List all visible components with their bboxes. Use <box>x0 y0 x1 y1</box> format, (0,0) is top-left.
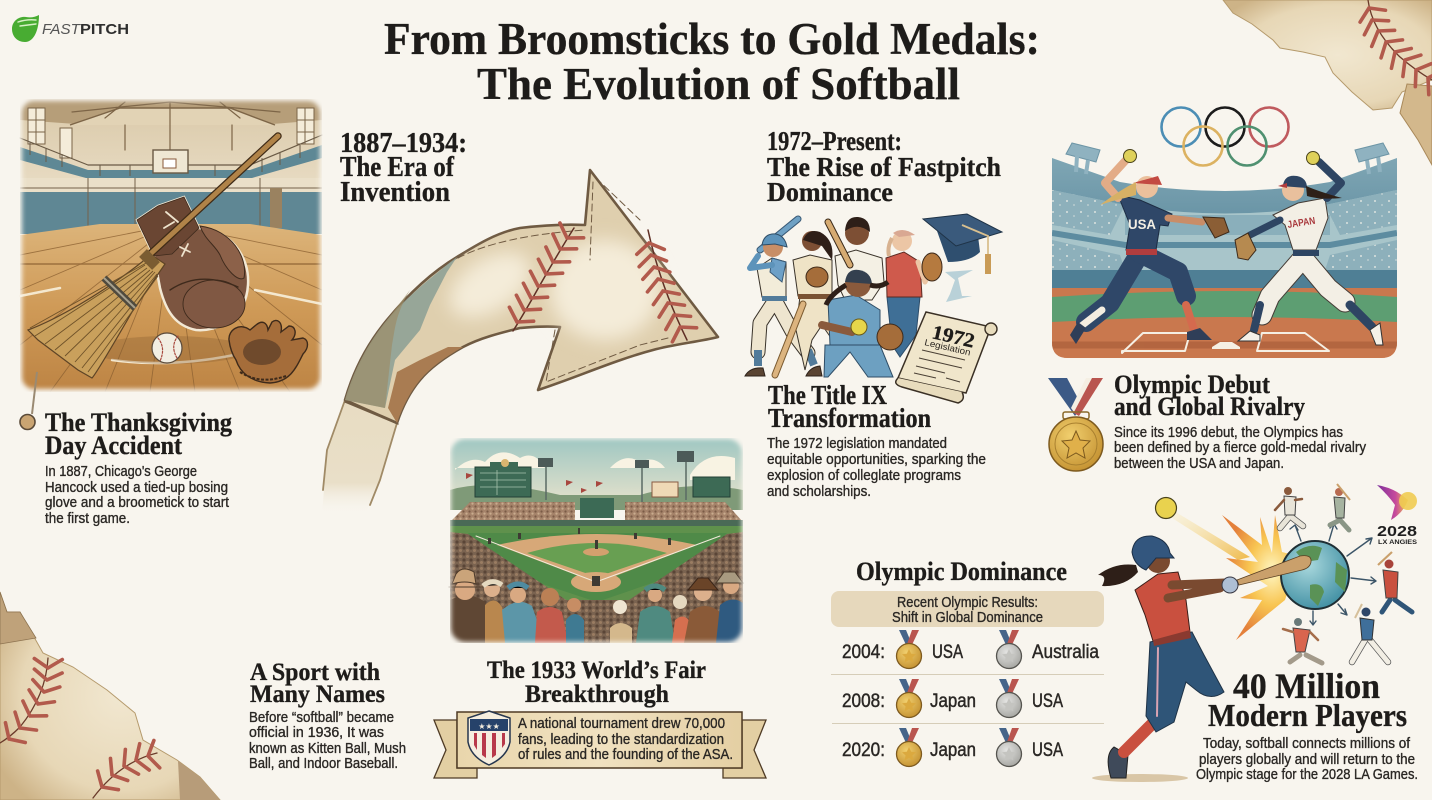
logo: FastPitch: PITCH <box>80 21 129 38</box>
text block: The Thanksgiving Day Accident: glove and a broometick to start <box>45 495 229 511</box>
heading: 1887–1934 The Era of Invention: The Era of <box>340 152 455 183</box>
icon: stars and stripes shield: ★★★ <box>478 722 500 731</box>
logo: FastPitch: FAST <box>42 21 82 38</box>
heading: The 1933 World's Fair Breakthrough <box>487 657 706 708</box>
corner: torn baseball top right <box>1223 0 1432 165</box>
text block: The Thanksgiving Day Accident: Day Accident <box>45 431 182 460</box>
player: red jersey player with mitt <box>886 230 942 357</box>
table header: Recent Olympic Results: <box>897 595 1038 611</box>
icon: 1972 legislation scroll: 1972 <box>930 321 977 353</box>
text block: The Title IX Transformation <box>767 380 986 500</box>
text block: Olympic Debut and Global Rivalry: Since its 1996 debut, the Olympics has <box>1114 425 1343 441</box>
text block: Olympic Debut and Global Rivalry: between the USA and Japan. <box>1114 456 1284 472</box>
icon: stadium lights <box>1066 143 1389 174</box>
row: 2020: 2020: <box>842 740 885 761</box>
icon: flying softball <box>1156 498 1250 560</box>
text block: 40 Million Modern Players: Modern Players <box>1208 697 1407 733</box>
icon: LA 2028 logo: 2028 <box>1377 523 1417 540</box>
player: batter in blue helmet <box>745 219 822 376</box>
icon: arrows from globe <box>1290 524 1376 625</box>
illustration: batter hitting the globe <box>1092 484 1418 782</box>
table header <box>831 591 1104 627</box>
icon: title nine mark <box>945 270 973 302</box>
icon: globe <box>1281 541 1349 609</box>
foreground spectators <box>448 569 743 643</box>
row: 2008: USA <box>1032 691 1063 712</box>
player: back row player with bat <box>828 217 884 300</box>
text block: The Title IX Transformation: The 1972 legislation mandated <box>767 436 947 452</box>
heading: 1972–Present The Rise of Fastpitch Dominance: The Rise of Fastpitch <box>767 152 1001 182</box>
icon: scoreboard <box>475 459 531 497</box>
heading: 1887–1934 The Era of Invention <box>340 128 467 208</box>
row: 2004 <box>842 630 1099 668</box>
text block: The Thanksgiving Day Accident: In 1887, Chicago's George <box>45 464 197 480</box>
row: 2004: 2004: <box>842 642 885 663</box>
row: 2020: Japan <box>930 740 976 761</box>
icon: LA 2028 logo: LX ANGIES <box>1378 539 1418 546</box>
row: 2020: USA <box>1032 740 1063 761</box>
row: 2008 <box>842 679 1063 718</box>
title: The Evolution of Softball <box>477 59 960 109</box>
text block: The Title IX Transformation: equitable opportunities, sparking the <box>767 452 986 468</box>
illustration: 1933 ballpark with crowd <box>448 438 743 643</box>
banner: tournament callout <box>434 711 766 778</box>
illustration: USA vs Japan pitchers in Olympic stadium <box>1052 143 1397 358</box>
text block: 40 Million Modern Players <box>1196 666 1418 783</box>
row: 2020 <box>842 728 1063 766</box>
icon: small players <box>1275 484 1412 663</box>
banner: tournament callout: A national tournament drew 70,000 <box>518 716 725 732</box>
text block: Olympic Debut and Global Rivalry: Olympic Debut <box>1114 370 1270 399</box>
banner: tournament callout: fans, leading to the standardization <box>518 732 724 748</box>
connector: timeline pin <box>20 372 37 430</box>
player: fielder with long hair <box>775 231 836 375</box>
arrow: baseball leather timeline arrow <box>322 170 718 515</box>
title <box>384 14 1040 109</box>
icon: softball <box>152 333 182 363</box>
icon: leather mitt <box>229 320 308 383</box>
text block: The Title IX Transformation: Transformation <box>768 403 931 433</box>
icon: impact burst <box>1222 515 1305 640</box>
text block: The Title IX Transformation: explosion of colleglate programs <box>767 468 961 484</box>
player: crouching pitcher front <box>822 270 903 377</box>
icon: 1972 legislation scroll: Legislation <box>924 337 972 358</box>
table: Olympic Dominance results <box>831 557 1104 766</box>
heading: 1972–Present The Rise of Fastpitch Dominance: 1972–Present: <box>767 126 902 156</box>
illustration: gymnasium with broom, boxing glove, ball and mitt <box>20 99 322 392</box>
text block: The Title IX Transformation: and scholarships. <box>767 484 871 500</box>
banner: tournament callout: of rules and the founding of the ASA. <box>518 747 733 763</box>
row: 2008: 2008: <box>842 691 885 712</box>
heading: 1887–1934 The Era of Invention: 1887–1934: <box>340 128 467 159</box>
text block: Olympic Debut and Global Rivalry <box>1114 370 1367 472</box>
heading: The 1933 World's Fair Breakthrough: The 1933 World’s Fair <box>487 657 706 684</box>
row: 2004: USA <box>932 642 963 663</box>
title: From Broomsticks to Gold Medals: <box>384 14 1040 64</box>
text block: 40 Million Modern Players: players globally and will return to the <box>1199 752 1415 768</box>
text block: Olympic Debut and Global Rivalry: and Global Rivalry <box>1114 392 1305 421</box>
player: USA pitcher <box>1070 150 1229 344</box>
icon: boxing glove <box>137 197 248 330</box>
text block: 40 Million Modern Players: Today, softball connects millions of <box>1203 736 1411 752</box>
icon: batter figure <box>1092 536 1238 782</box>
player: Japan pitcher <box>1235 152 1383 345</box>
text block: The Thanksgiving Day Accident <box>45 408 232 527</box>
text block: A Sport with Many Names: A Sport with <box>250 659 380 686</box>
text block: A Sport with Many Names: Many Names <box>250 681 385 708</box>
row: 2004: Australia <box>1032 642 1099 663</box>
text block: A Sport with Many Names: known as Kitten Ball, Mush <box>249 741 406 757</box>
text block: 40 Million Modern Players: 40 Million <box>1233 666 1380 706</box>
heading: The 1933 World's Fair Breakthrough: Breakthrough <box>525 681 669 708</box>
player: USA pitcher: USA <box>1128 216 1156 232</box>
icon: graduation cap <box>923 214 1002 274</box>
icon: Olympic rings <box>1162 108 1288 166</box>
text block: The Title IX Transformation: The Title IX <box>768 380 887 410</box>
table header: Shift in Global Dominance <box>892 610 1043 626</box>
text block: A Sport with Many Names: Before “softball” became <box>249 710 394 726</box>
icon: broom <box>28 136 278 378</box>
text block: Olympic Debut and Global Rivalry: been defined by a fierce gold-medal rivalry <box>1114 440 1367 456</box>
corner: torn baseball bottom left <box>0 592 220 800</box>
text block: The Thanksgiving Day Accident: Hancock used a tied-up bosing <box>45 480 228 496</box>
logo: FastPitch <box>12 15 129 42</box>
text block: A Sport with Many Names <box>249 659 406 772</box>
row: 2008: Japan <box>930 691 976 712</box>
icon: gold medal with ribbon <box>1048 378 1103 471</box>
icon: stars and stripes shield <box>468 711 510 765</box>
heading: 1887–1934 The Era of Invention: Invention <box>340 177 450 208</box>
text block: A Sport with Many Names: Ball, and Indoor Baseball. <box>249 756 398 772</box>
text block: The Thanksgiving Day Accident: The Thanksgiving <box>45 408 232 437</box>
heading: 1972–Present The Rise of Fastpitch Dominance: Dominance <box>767 177 893 207</box>
text block: The Thanksgiving Day Accident: the first game. <box>45 511 130 527</box>
text block: A Sport with Many Names: official in 1936, It was <box>249 725 384 741</box>
icon: LA 2028 logo <box>1377 485 1418 546</box>
icon: 1972 legislation scroll <box>896 312 997 403</box>
illustration: team of collegiate players <box>745 214 1002 403</box>
table: Olympic Dominance results: Olympic Dominance <box>856 557 1067 586</box>
heading: 1972–Present The Rise of Fastpitch Dominance <box>767 126 1001 207</box>
icon: bat <box>1237 556 1311 585</box>
player: Japan pitcher: JAPAN <box>1287 216 1316 231</box>
